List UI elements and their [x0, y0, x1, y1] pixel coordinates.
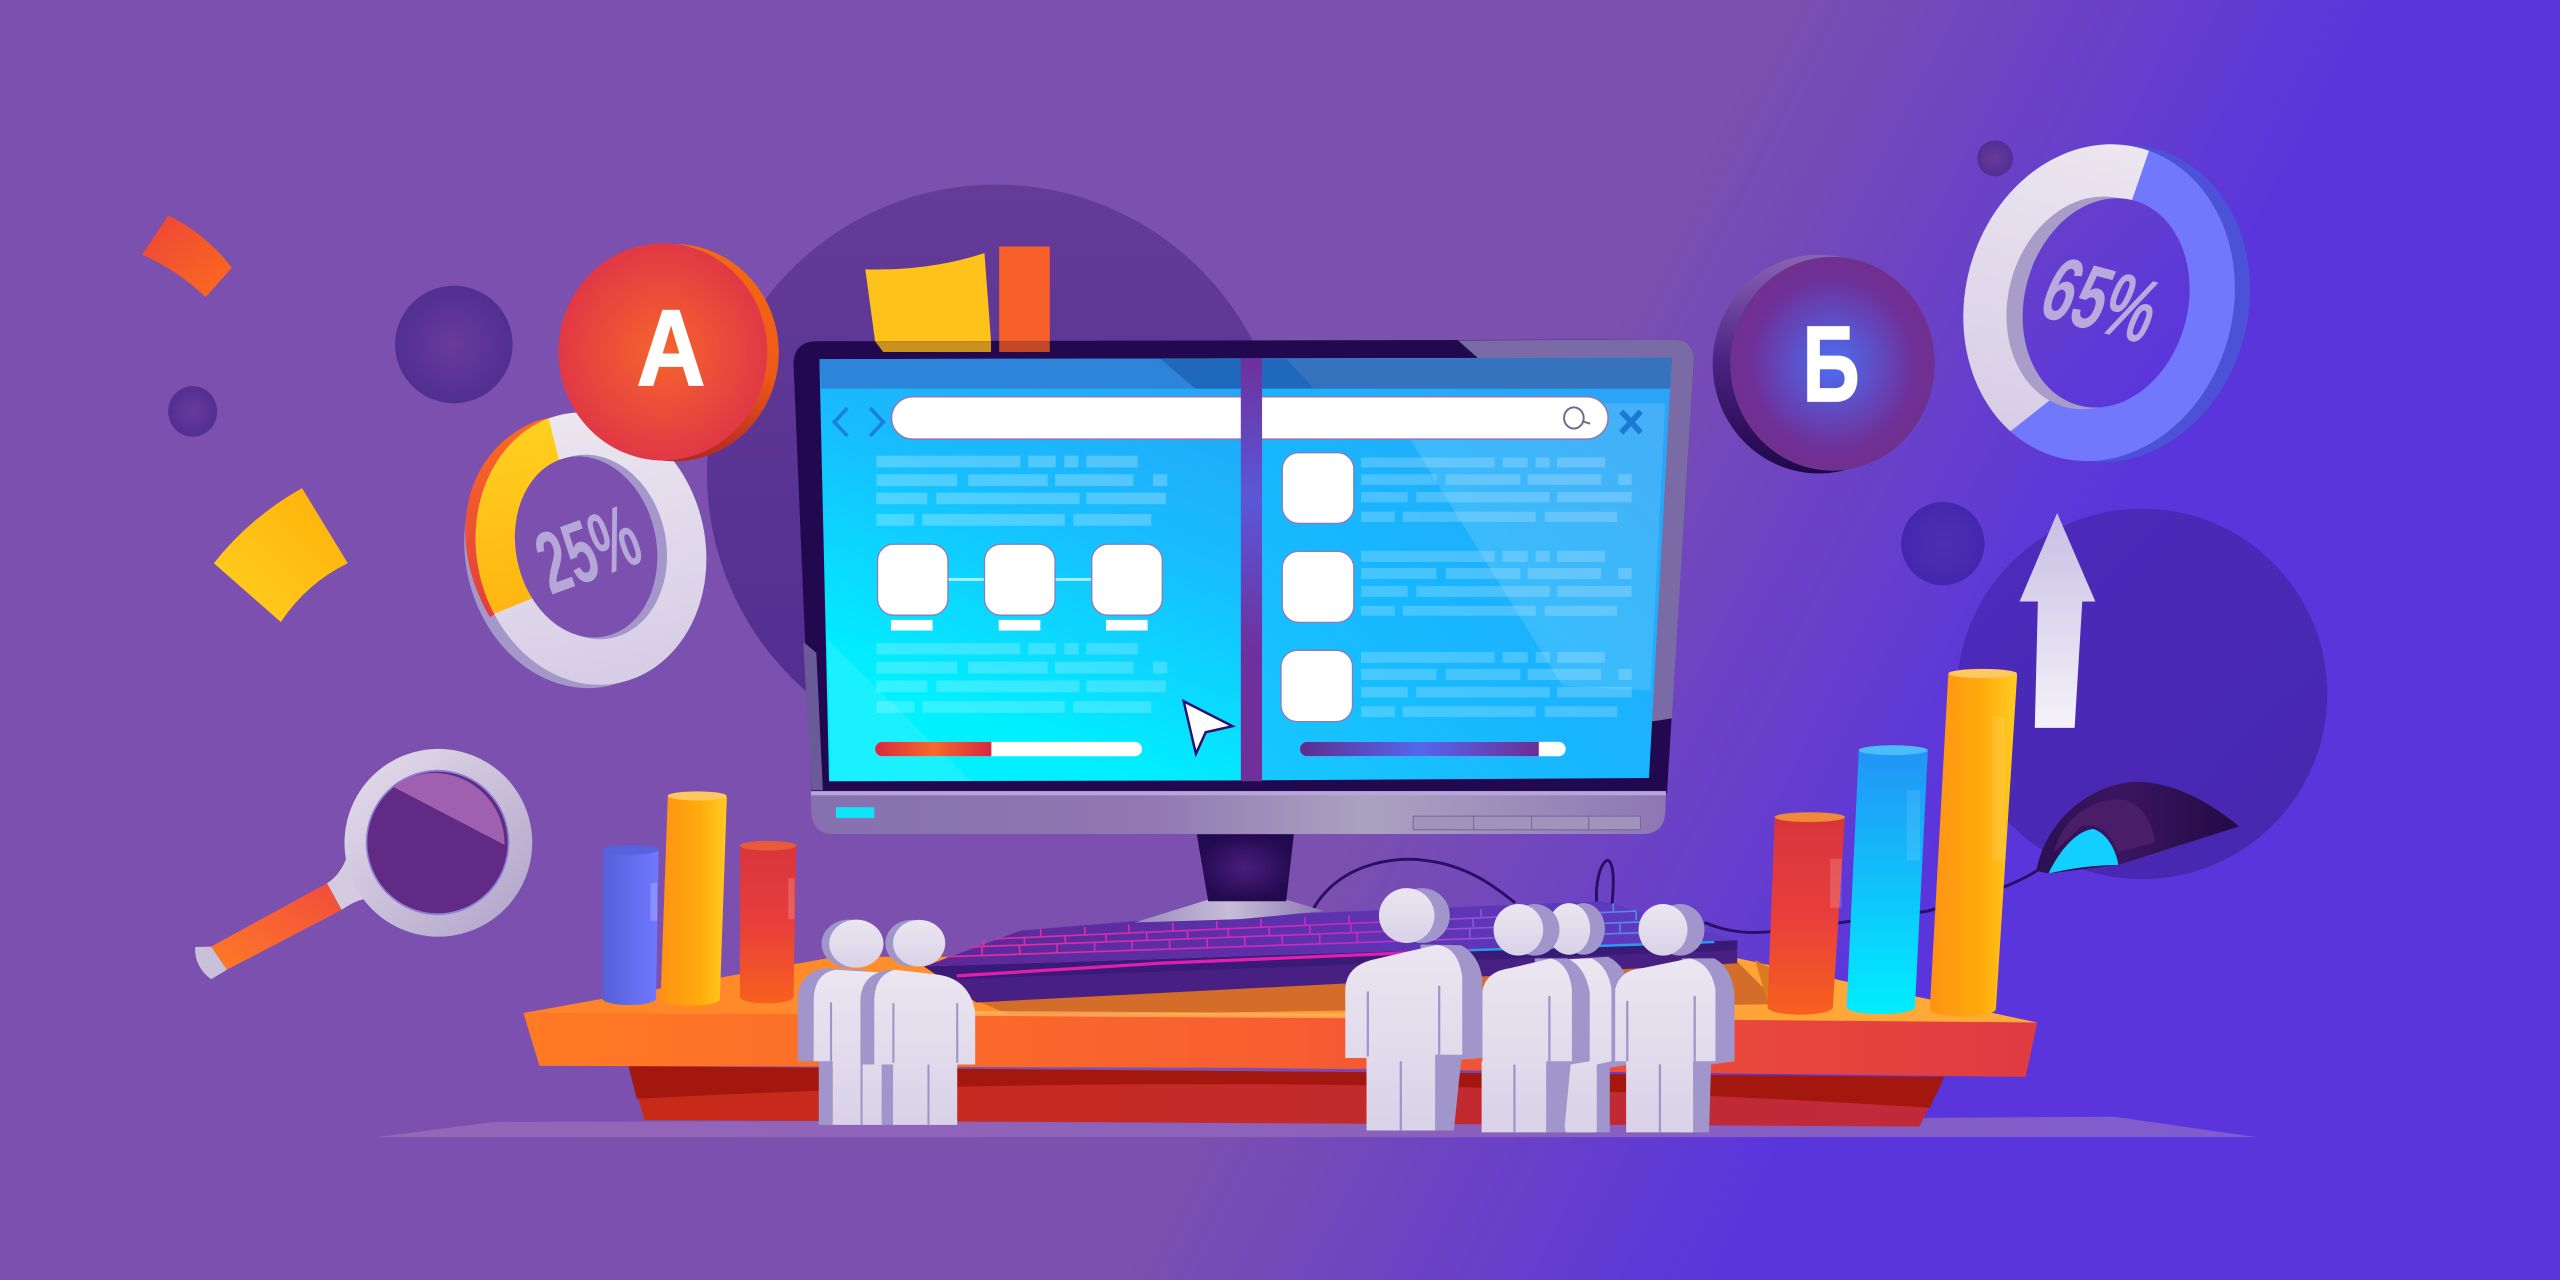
three right side boxes — [1281, 453, 1354, 722]
dark circle behind monitor — [707, 184, 1285, 762]
mouse — [2036, 782, 2239, 873]
person D — [1615, 904, 1735, 1132]
letter A: A — [637, 287, 705, 408]
mouse button — [2048, 829, 2118, 873]
bezel — [793, 340, 1694, 793]
disc A — [558, 243, 779, 461]
yellow confetti piece — [214, 488, 348, 622]
red cylinder — [1768, 818, 1845, 1015]
divider between variants — [1241, 358, 1262, 781]
people right group — [1345, 888, 1735, 1132]
donut chart 25% — [464, 412, 706, 688]
text bars right — [1361, 457, 1632, 717]
orange cylinder — [661, 797, 727, 1006]
text bars left top — [876, 456, 1167, 526]
monitor buttons — [1413, 816, 1640, 830]
disc B — [1713, 255, 1935, 473]
monitor — [793, 340, 1694, 834]
keyboard — [924, 901, 1737, 1002]
red confetti piece — [142, 216, 232, 297]
decorative circle small left — [168, 386, 217, 437]
label 25%: 25% — [523, 485, 652, 613]
donut chart 65% — [1963, 144, 2250, 462]
letter Б: Б — [1802, 303, 1860, 424]
screen header bar — [819, 358, 1672, 389]
person behind — [1548, 903, 1629, 1132]
power led — [836, 807, 874, 818]
red cylinder — [740, 846, 796, 1003]
three content boxes — [878, 544, 1162, 631]
decorative circle large left — [395, 286, 513, 403]
yellow note — [865, 253, 991, 341]
blue cylinder — [1847, 751, 1928, 1014]
platform — [523, 955, 2037, 1127]
progress bar A — [875, 742, 1142, 756]
progress bar B — [1300, 742, 1566, 756]
orange cylinder — [1930, 674, 2017, 1016]
sticky notes on monitor — [865, 247, 1050, 352]
person 1 — [798, 920, 891, 1125]
cursor — [1184, 701, 1232, 754]
search icon — [1564, 407, 1590, 429]
floor strip — [376, 1117, 2256, 1137]
handle — [211, 883, 342, 970]
right cylinder chart — [1768, 669, 2017, 1016]
address bar — [891, 397, 1608, 439]
person B — [1482, 904, 1590, 1132]
red note — [999, 247, 1050, 341]
screen — [819, 358, 1254, 781]
monitor chin — [811, 791, 1666, 834]
decorative circle middle right — [1901, 502, 1984, 585]
cables — [1314, 859, 2038, 932]
person 2 — [860, 920, 975, 1125]
magnifying glass — [195, 749, 532, 979]
close icon — [1621, 411, 1641, 433]
up arrow — [2020, 513, 2095, 728]
blue cylinder — [602, 851, 659, 1005]
back and forward chevrons — [834, 408, 883, 436]
text bars left bottom — [876, 643, 1167, 713]
monitor stand — [1135, 834, 1324, 922]
label 65%: 65% — [2028, 239, 2175, 362]
dark circle behind mouse and arrow — [1957, 509, 2327, 879]
decorative circle small right — [1977, 140, 2013, 176]
lens — [344, 749, 532, 937]
person A — [1345, 888, 1482, 1130]
people left group — [798, 920, 975, 1125]
left cylinder chart — [602, 791, 796, 1006]
